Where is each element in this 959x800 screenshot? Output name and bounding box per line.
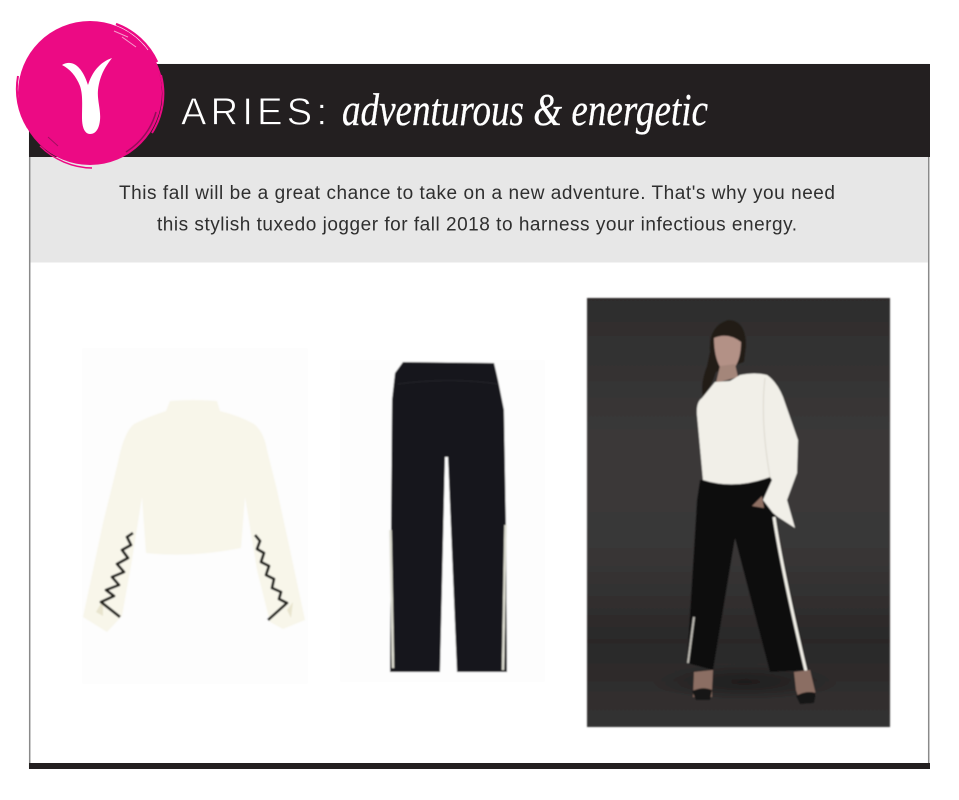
model face — [714, 336, 741, 371]
jogger trousers — [390, 362, 507, 672]
jogger right stripe — [503, 525, 506, 670]
panel: jogger product image — [340, 360, 545, 682]
jogger left stripe — [390, 530, 393, 668]
intro text — [119, 183, 835, 236]
panel: header bar — [29, 64, 930, 157]
model hand — [752, 496, 764, 508]
model sandals and feet — [692, 670, 816, 704]
model sweater — [697, 374, 798, 528]
heading: ARIES: ARIES: — [181, 92, 327, 134]
panel: sweater product image — [82, 348, 308, 684]
panel: intro band — [30, 157, 928, 262]
model shadow — [650, 664, 840, 700]
model trouser stripes — [774, 517, 806, 671]
model ponytail and hair — [702, 320, 746, 397]
model trousers — [687, 478, 808, 672]
sweater laces left — [101, 533, 133, 617]
icon: pink brush circle with Aries symbol — [17, 21, 163, 168]
heading: script tagline: adventurous & energetic — [342, 84, 708, 135]
icon: Aries glyph — [62, 58, 112, 134]
panel: model photo — [587, 298, 890, 727]
intro text: This fall will be a great chance to take on a new adventure. That's why you need — [119, 183, 835, 204]
sweater laces right — [255, 535, 287, 620]
sweater body — [83, 400, 305, 632]
intro text: this stylish tuxedo jogger for fall 2018 to harness your infectious energy. — [157, 214, 797, 236]
